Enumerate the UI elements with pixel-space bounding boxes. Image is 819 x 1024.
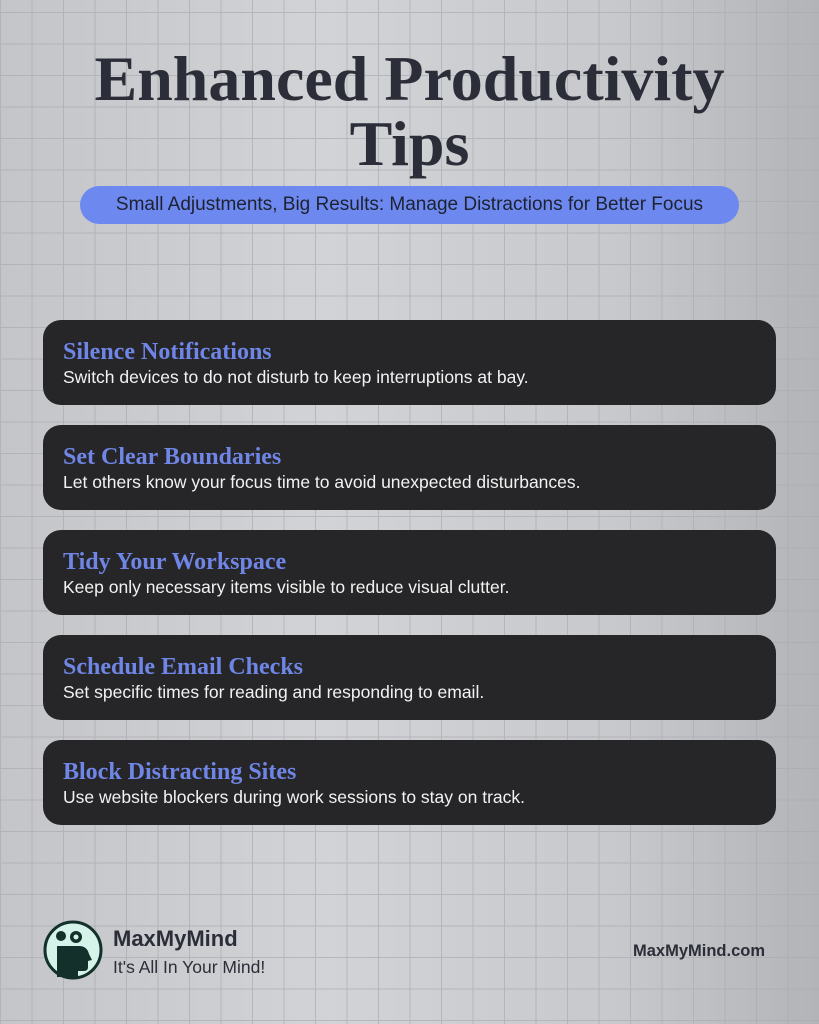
card: set clear boundaries: Set Clear Boundaries xyxy=(63,444,281,470)
card: tidy workspace: Keep only necessary items visible to reduce visual clutter. xyxy=(63,577,509,597)
subtitle pill: Small Adjustments, Big Results: Manage Distractions for Better Focus xyxy=(116,194,703,215)
website: MaxMyMind.com xyxy=(633,942,765,960)
card: tidy workspace xyxy=(43,530,776,615)
card: tidy workspace: Tidy Your Workspace xyxy=(63,549,286,575)
card: schedule email xyxy=(43,635,776,720)
card: set clear boundaries: Let others know your focus time to avoid unexpected disturbances. xyxy=(63,472,581,492)
title: Enhanced Productivity xyxy=(94,43,724,114)
title: Tips xyxy=(350,108,469,179)
card: schedule email: Set specific times for reading and responding to email. xyxy=(63,682,484,702)
card: set clear boundaries xyxy=(43,425,776,510)
title xyxy=(94,43,724,179)
logo icon xyxy=(44,920,102,980)
card: block sites xyxy=(43,740,776,825)
brand name: MaxMyMind xyxy=(113,926,238,951)
card: block sites: Block Distracting Sites xyxy=(63,759,296,785)
card: silence notifications: Silence Notifications xyxy=(63,339,272,365)
card: silence notifications xyxy=(43,320,776,405)
card: silence notifications: Switch devices to do not disturb to keep interruptions at bay. xyxy=(63,367,529,387)
tagline: It's All In Your Mind! xyxy=(113,957,265,977)
card: block sites: Use website blockers during work sessions to stay on track. xyxy=(63,787,525,807)
card: schedule email: Schedule Email Checks xyxy=(63,654,303,680)
subtitle pill xyxy=(80,186,739,224)
